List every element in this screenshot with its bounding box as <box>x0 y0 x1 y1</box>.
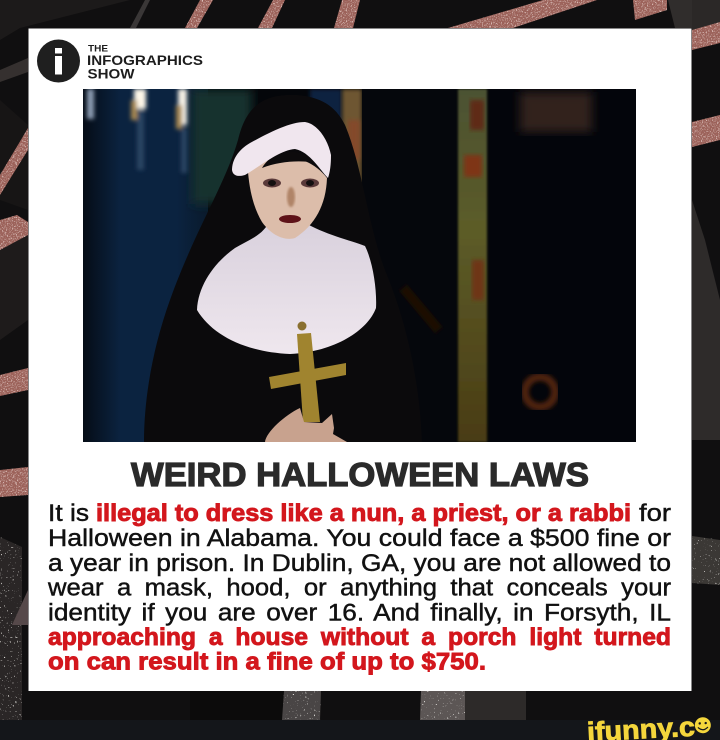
logo wordmark <box>87 44 203 82</box>
logo wordmark: SHOW <box>88 66 135 82</box>
nun habit and veil <box>144 96 362 442</box>
body paragraph: approaching a house without a porch light turned <box>48 624 671 651</box>
icon: smiley <box>694 717 711 734</box>
hair fringe <box>262 156 307 168</box>
icon: info circle <box>37 40 80 82</box>
golden cross <box>269 322 346 422</box>
highlights at top of curtain <box>87 89 187 173</box>
body paragraph: for <box>639 500 671 527</box>
hand <box>265 408 347 442</box>
body paragraph <box>47 500 671 676</box>
logo wordmark: THE <box>88 44 108 54</box>
white headband <box>232 122 331 178</box>
body paragraph: on can result in a fine of up to $750. <box>48 648 486 676</box>
title: WEIRD HALLOWEEN LAWS <box>131 456 589 493</box>
photo: woman dressed as a nun holding a cross <box>83 89 636 442</box>
eyes and lips <box>263 178 319 223</box>
photo backdrop <box>83 89 636 442</box>
footer bar <box>0 720 720 740</box>
logo: The Infographics Show <box>37 40 203 82</box>
body paragraph: wear a mask, hood, or anything that conceals your <box>47 574 671 602</box>
body paragraph: identity if you are over 16. And finally, in Forsyth, IL <box>48 600 671 626</box>
logo wordmark: INFOGRAPHICS <box>87 53 203 68</box>
body paragraph: a year in prison. In Dublin, GA, you are not allowed to <box>48 550 671 577</box>
white collar <box>197 219 376 354</box>
body paragraph: Halloween in Alabama. You could face a $500 fine or <box>48 525 671 552</box>
body paragraph: illegal to dress like a nun, a priest, or a rabbi <box>96 500 631 527</box>
face <box>248 156 327 239</box>
body paragraph: It is <box>48 500 89 527</box>
